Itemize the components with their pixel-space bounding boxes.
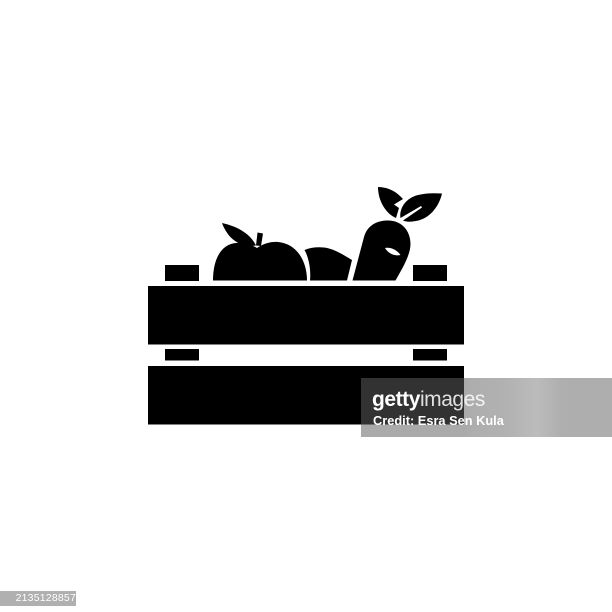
middle vegetable xyxy=(304,247,352,280)
carrot right leaf xyxy=(400,193,442,222)
crate right upper post xyxy=(413,265,447,281)
apple leaf xyxy=(222,223,256,246)
crate bottom plank xyxy=(148,366,464,424)
watermark banner xyxy=(361,378,612,437)
image id xyxy=(0,591,76,606)
carrot xyxy=(352,187,442,280)
watermark logo: gettyimages xyxy=(372,388,485,411)
apple stem xyxy=(256,232,263,246)
crate left middle post xyxy=(165,349,199,360)
apple xyxy=(213,223,307,280)
crate right middle post xyxy=(413,349,447,360)
carrot left leaf xyxy=(378,187,403,218)
crate left upper post xyxy=(165,265,199,281)
watermark credit: Credit: Esra Sen Kula xyxy=(373,413,504,428)
image id: 2135128857 xyxy=(16,592,76,604)
crate top plank xyxy=(148,286,464,344)
